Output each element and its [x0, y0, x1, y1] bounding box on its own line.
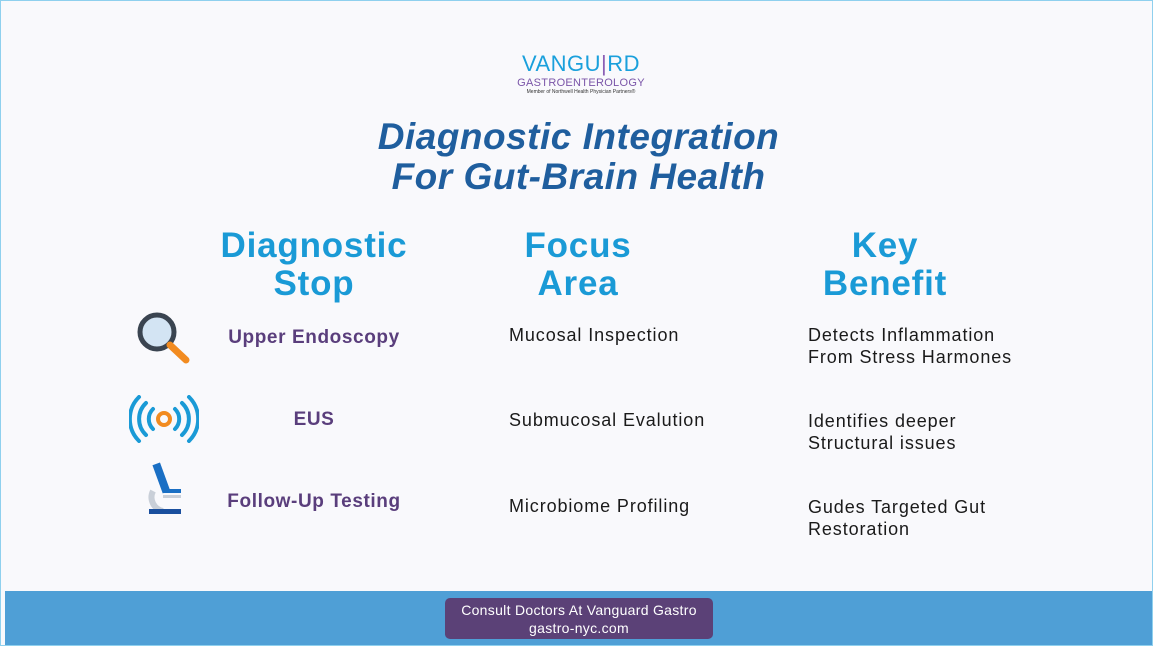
heading: focus area	[524, 226, 632, 303]
row 1 benefit	[808, 325, 1012, 367]
row 1 benefit: From Stress Harmones	[808, 347, 1012, 367]
logo: GASTROENTEROLOGY	[517, 77, 645, 89]
heading: diagnostic stop	[221, 226, 407, 303]
title	[378, 116, 779, 197]
heading: focus area: Focus	[524, 226, 632, 265]
logo: Member of Northwell Health Physician Partners®	[527, 89, 635, 95]
icon: signal	[129, 395, 199, 443]
row 3 focus: Microbiome Profiling	[509, 496, 690, 516]
row 1 focus: Mucosal Inspection	[509, 325, 679, 345]
row 1 benefit: Detects Inflammation	[808, 325, 995, 345]
row 3 benefit	[808, 497, 986, 539]
row 3 label: Follow-Up Testing	[227, 491, 401, 512]
logo	[517, 51, 645, 95]
row 1 label: Upper Endoscopy	[228, 327, 400, 348]
icon: microscope	[148, 462, 181, 514]
row 3 benefit: Gudes Targeted Gut	[808, 497, 986, 517]
logo: VANGU|RD	[522, 51, 640, 76]
heading: focus area: Area	[537, 264, 619, 303]
heading: key benefit: Benefit	[823, 264, 947, 303]
footer band	[5, 591, 1152, 645]
heading: key benefit: Key	[852, 226, 918, 265]
row 2 focus: Submucosal Evalution	[509, 410, 705, 430]
heading: diagnostic stop: Stop	[274, 264, 354, 303]
footer callout	[445, 598, 713, 639]
footer callout: Consult Doctors At Vanguard Gastro	[461, 602, 697, 618]
icon: magnifier	[138, 312, 190, 364]
title: For Gut-Brain Health	[392, 156, 765, 197]
row 2 label: EUS	[294, 409, 334, 430]
heading: diagnostic stop: Diagnostic	[221, 226, 407, 265]
heading: key benefit	[823, 226, 947, 303]
row 2 benefit: Structural issues	[808, 433, 956, 453]
row 3 benefit: Restoration	[808, 519, 910, 539]
row 2 benefit: Identifies deeper	[808, 411, 956, 431]
footer callout: gastro-nyc.com	[529, 620, 629, 636]
row 2 benefit	[808, 411, 956, 453]
title: Diagnostic Integration	[378, 116, 779, 157]
